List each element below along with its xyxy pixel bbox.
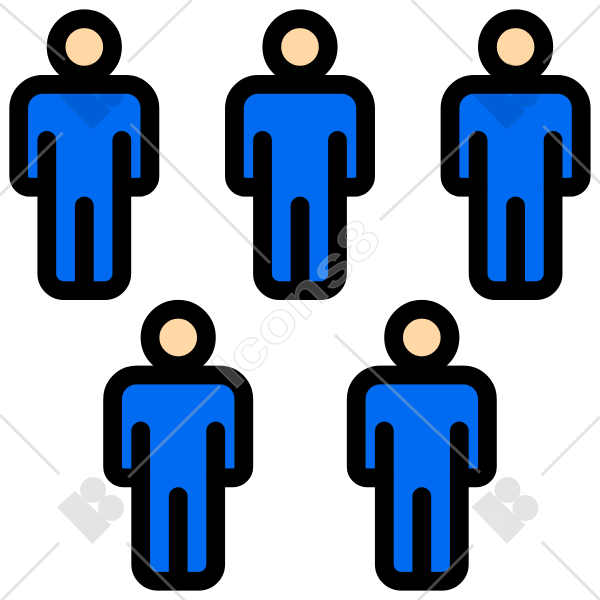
icon: person bottom right bbox=[356, 309, 487, 581]
watermark: logo bottom left bbox=[57, 477, 124, 544]
icon: person top right bbox=[450, 19, 581, 291]
watermark: Icons8 text: Icons8 bbox=[199, 206, 392, 399]
icon: person bottom left bbox=[113, 309, 244, 581]
icon: person top left bbox=[19, 19, 150, 291]
watermark: logo top left bbox=[57, 63, 124, 130]
watermark: logo bottom right bbox=[472, 477, 538, 544]
icon: person top centre bbox=[234, 19, 366, 291]
watermark: logo top right bbox=[472, 63, 538, 130]
